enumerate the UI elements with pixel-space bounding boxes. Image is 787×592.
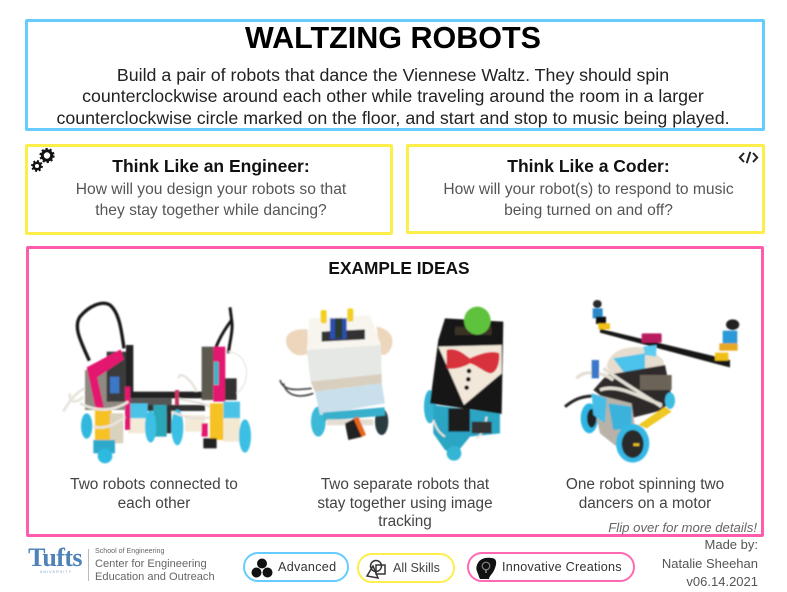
badge: all skills <box>357 553 455 583</box>
logo center name: Center for Engineering <box>95 558 207 570</box>
panel: think like an engineer <box>25 144 393 235</box>
photo: two connected robots <box>63 303 251 463</box>
photo: two separate robots <box>280 307 503 461</box>
badge: advanced <box>243 552 349 582</box>
caption: connected robots <box>70 476 238 512</box>
heading: coder: Think Like a Coder: <box>507 156 670 176</box>
caption: spinning dancers <box>566 476 724 512</box>
question: coder: How will your robot(s) to respond to music <box>443 180 734 198</box>
logo sub-wordmark: UNIVERSITY <box>40 570 72 574</box>
logo center name: Education and Outreach <box>95 571 215 583</box>
label: all skills: All Skills <box>393 561 440 575</box>
label: innovative creations: Innovative Creations <box>502 560 622 574</box>
challenge description: Build a pair of robots that dance the Viennese Waltz. They should spin <box>117 64 669 84</box>
logo wordmark: Tufts <box>28 543 82 572</box>
credits: author and version: Natalie Sheehan <box>662 556 758 570</box>
question: coder <box>443 180 734 218</box>
panel: think like a coder <box>406 144 765 234</box>
question: engineer <box>76 180 346 218</box>
challenge description: counterclockwise circle marked on the floor, and start and stop to music being played. <box>56 108 730 128</box>
icon: head with light bulb <box>476 558 496 579</box>
challenge description <box>56 64 730 128</box>
icon: three circles <box>252 558 272 578</box>
caption: connected robots: Two robots connected to <box>70 476 238 493</box>
heading: engineer: Think Like an Engineer: <box>112 156 310 176</box>
logo center name <box>95 558 215 583</box>
question: engineer: How will you design your robots so that <box>76 180 346 198</box>
label: advanced: Advanced <box>278 560 336 574</box>
credits: author and version: Made by: <box>705 537 758 552</box>
credits: author and version <box>662 537 758 589</box>
question: engineer: they stay together while dancing? <box>95 202 327 218</box>
panel: challenge header <box>25 19 765 131</box>
icon: gears <box>31 148 55 172</box>
heading: example ideas: EXAMPLE IDEAS <box>328 258 470 278</box>
caption: separate robots: tracking <box>378 513 432 530</box>
caption: separate robots <box>317 476 493 530</box>
challenge description: counterclockwise around each other while traveling around the room in a larger <box>82 86 704 106</box>
caption: connected robots: each other <box>118 494 190 512</box>
icon: overlapping shapes <box>366 560 386 579</box>
question: coder: being turned on and off? <box>504 202 673 218</box>
caption: spinning dancers: One robot spinning two <box>566 476 724 493</box>
title: WALTZING ROBOTS <box>245 21 541 55</box>
icon: code brackets <box>738 152 758 164</box>
logo text: School of Engineering <box>95 547 164 555</box>
note: flip over: Flip over for more details! <box>608 520 757 535</box>
badge: innovative creations <box>467 552 635 582</box>
caption: spinning dancers: dancers on a motor <box>579 494 711 512</box>
logo: Tufts center for engineering education and outreach <box>28 543 215 583</box>
panel: example ideas <box>26 246 764 537</box>
photo: robot spinning two dancers <box>565 300 739 463</box>
credits: author and version: v06.14.2021 <box>686 574 758 589</box>
caption: separate robots: stay together using image <box>317 494 493 512</box>
caption: separate robots: Two separate robots that <box>321 476 489 493</box>
